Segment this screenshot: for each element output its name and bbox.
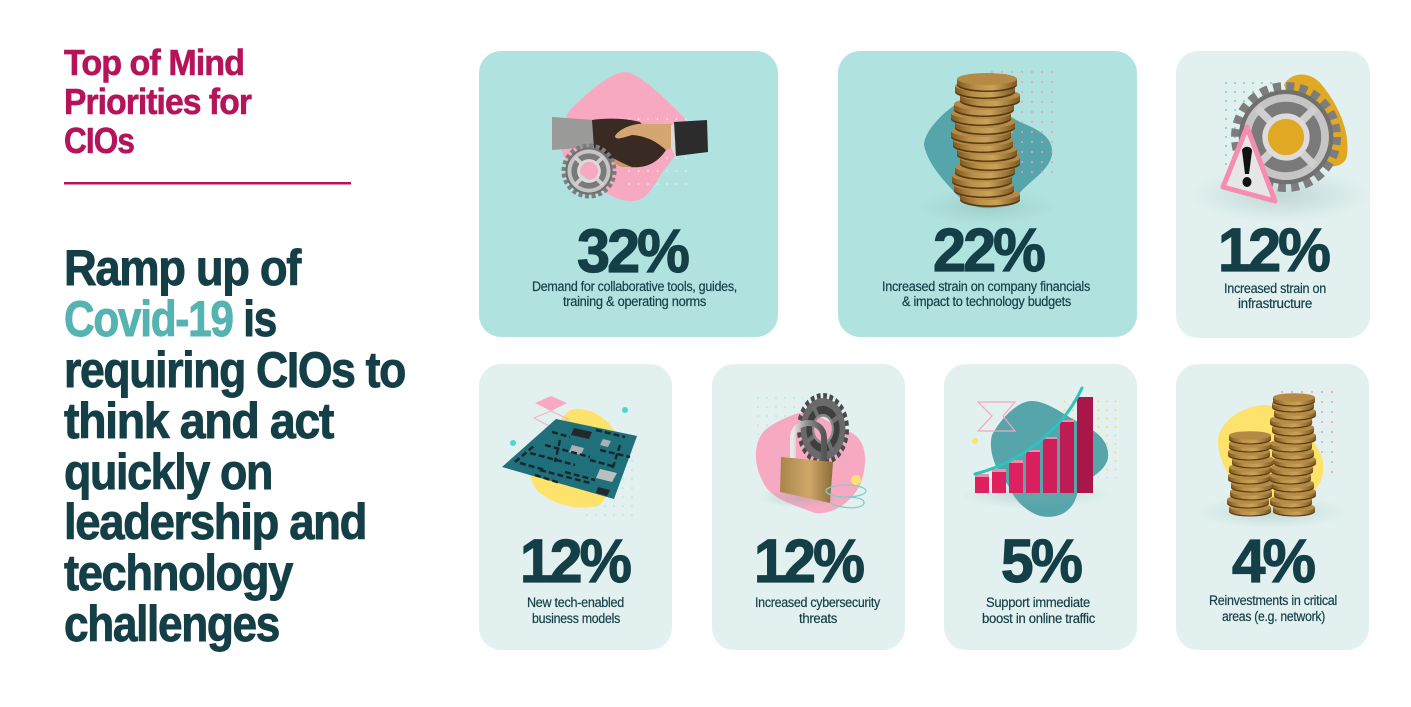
panel: 22% company financials [838,51,1137,337]
icon: handshake and gear [552,72,708,201]
description: infrastructure [1238,296,1312,311]
panel: 4% reinvestments [1176,364,1369,650]
icon: gear and warning sign [1190,74,1370,223]
main statement text [64,240,405,652]
value: 32% [577,217,689,285]
icon: two coin stacks [1196,387,1348,529]
right stack [1269,393,1316,516]
description: New tech-enabled [527,595,624,610]
panel: 32% collaborative tools [479,51,778,337]
description [1224,281,1326,311]
main statement text: quickly on [64,444,272,500]
description: boost in online traffic [982,611,1096,626]
main statement text: leadership and [64,494,366,550]
description: business models [532,611,620,626]
description: & impact to technology budgets [902,294,1072,309]
description: areas (e.g. network) [1222,609,1325,624]
heading: Top of Mind Priorities for CIOs: Top of Mind [64,42,244,83]
value: 12% [520,527,631,595]
description [1209,593,1337,624]
value: 5% [1001,527,1082,595]
panel: 12% infrastructure [1176,51,1370,338]
main statement text: Ramp up of [64,240,302,296]
bars [975,397,1093,493]
description: Increased strain on company financials [882,279,1091,294]
icon: padlock and gear [751,389,866,513]
main statement text: technology [64,545,294,601]
icon: rising bar chart [959,388,1118,517]
heading: Top of Mind Priorities for CIOs: Priorities for [64,81,252,122]
main statement text: challenges [64,596,279,652]
panel: 12% cybersecurity threats [712,364,905,650]
panel: 5% online traffic [944,364,1137,650]
main statement text: Covid-19 is [64,291,276,347]
description [982,595,1096,626]
description: Increased strain on [1224,281,1326,296]
description: threats [799,611,838,626]
description [882,279,1091,309]
description: Increased cybersecurity [755,595,880,610]
main statement text: requiring CIOs to [64,342,405,398]
value: 12% [1218,216,1330,284]
description: training & operating norms [563,294,707,309]
value: 4% [1232,527,1315,595]
heading: Top of Mind Priorities for CIOs: CIOs [64,120,134,161]
description [755,595,880,626]
description: Demand for collaborative tools, guides, [532,279,737,294]
left stack [1227,431,1274,516]
value: 12% [754,527,864,595]
description: Support immediate [986,595,1090,610]
description [527,595,624,626]
description [532,279,737,309]
main statement text: think and act [64,393,335,449]
value: 22% [933,216,1045,284]
description: Reinvestments in critical [1209,593,1337,608]
panel: 12% tech-enabled business models [479,364,672,650]
heading: Top of Mind Priorities for CIOs [64,42,252,161]
icon: circuit board [502,396,638,523]
icon: coin stack [917,66,1057,225]
